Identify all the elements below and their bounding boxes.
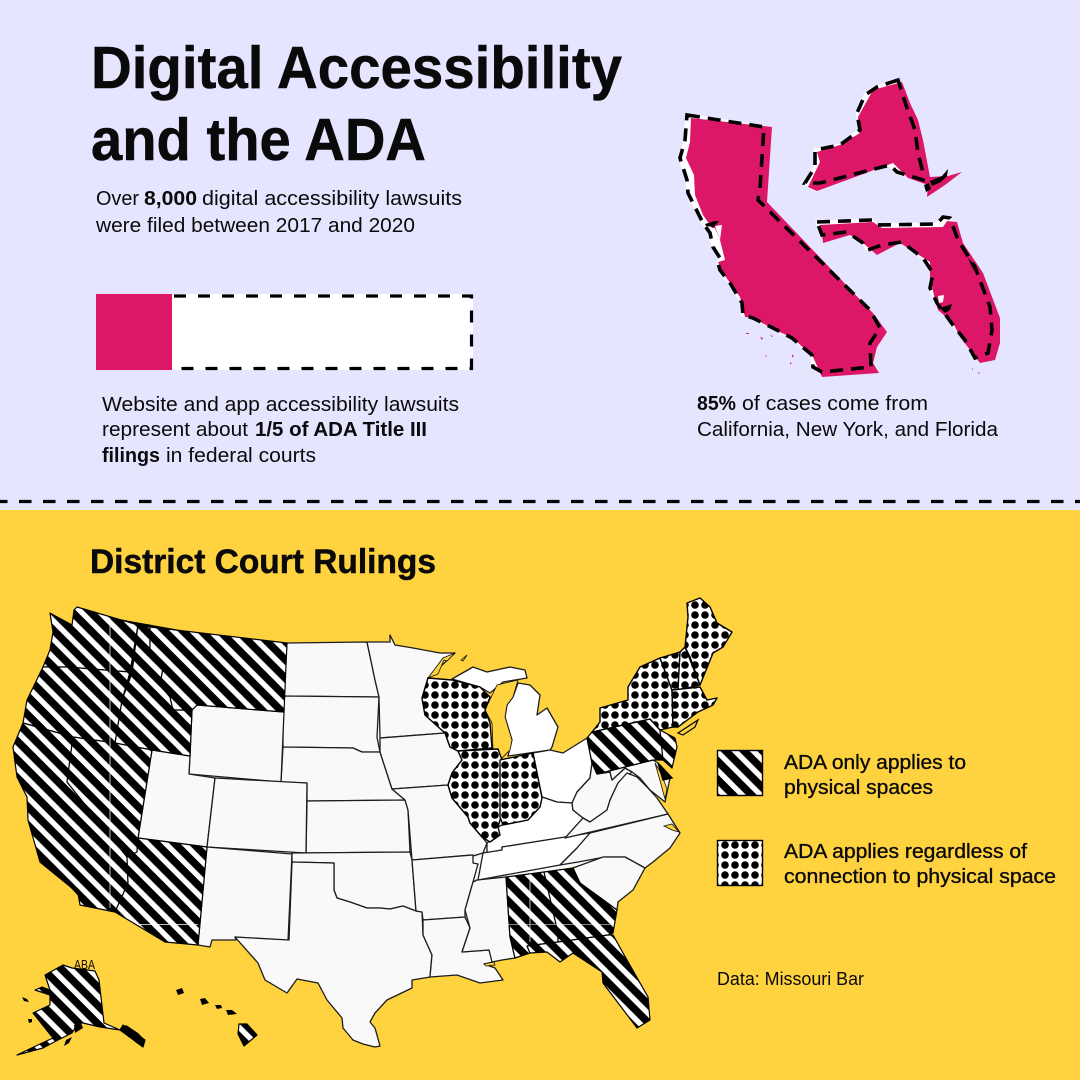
state: Florida <box>817 217 1000 374</box>
pattern seams <box>110 618 610 942</box>
map: United States by court ruling <box>13 598 732 1055</box>
legend: ADA applies regardless of connection: connection to physical space <box>784 866 1056 888</box>
state: Hawaii <box>176 988 257 1046</box>
panel: district court rulings section <box>0 510 1080 1080</box>
text: share of Title III filings: Website and app accessibility lawsuits <box>102 394 459 416</box>
chart: one-fifth progress bar <box>96 294 473 370</box>
text: share of Title III filings: 1/5 of ADA Title III <box>255 419 427 441</box>
text: lawsuit count: Over <box>96 188 139 210</box>
states: ADA applies regardless of physical connection <box>422 598 732 842</box>
text: lawsuit count: 8,000 <box>144 188 197 210</box>
legend: ADA only applies to physical spaces: ADA only applies to <box>784 752 966 774</box>
text: share of cases by state <box>697 393 999 441</box>
legend: ADA applies regardless of connection <box>718 840 1056 888</box>
map: California, New York and Florida <box>680 80 1000 377</box>
text: lawsuit count: were filed between 2017 and 2020 <box>95 215 415 237</box>
text: share of cases by state: California, New York, and Florida <box>697 419 999 441</box>
title <box>91 35 622 173</box>
title: Digital Accessibility <box>91 35 622 101</box>
legend: ADA only applies to physical spaces: physical spaces <box>784 777 933 799</box>
bays <box>428 653 679 966</box>
states: ADA only applies to physical spaces <box>13 607 677 1028</box>
state: California <box>680 115 887 377</box>
state: Alaska <box>17 957 145 1055</box>
heading: district court rulings: District Court Rulings <box>90 543 436 581</box>
text: lawsuit count: digital accessibility lawsuits <box>202 188 462 210</box>
text: share of Title III filings: represent about <box>102 419 248 441</box>
source note: Data: Missouri Bar <box>717 969 864 989</box>
legend: ADA only applies to physical spaces <box>718 750 966 799</box>
panel: top summary section <box>0 0 1080 510</box>
text: share of cases by state: of cases come from <box>742 393 928 415</box>
state: New York <box>805 80 962 197</box>
text: share of Title III filings: filings <box>102 445 160 467</box>
label: ABA: ABA <box>74 957 95 972</box>
title: and the ADA <box>91 107 426 173</box>
legend: ADA applies regardless of connection: ADA applies regardless of <box>784 841 1027 863</box>
text: lawsuit count <box>95 188 462 237</box>
states: no ruling <box>138 635 680 1047</box>
text: share of Title III filings: in federal courts <box>166 445 316 467</box>
text: share of cases by state: 85% <box>697 393 736 415</box>
text: share of Title III filings <box>102 394 459 467</box>
